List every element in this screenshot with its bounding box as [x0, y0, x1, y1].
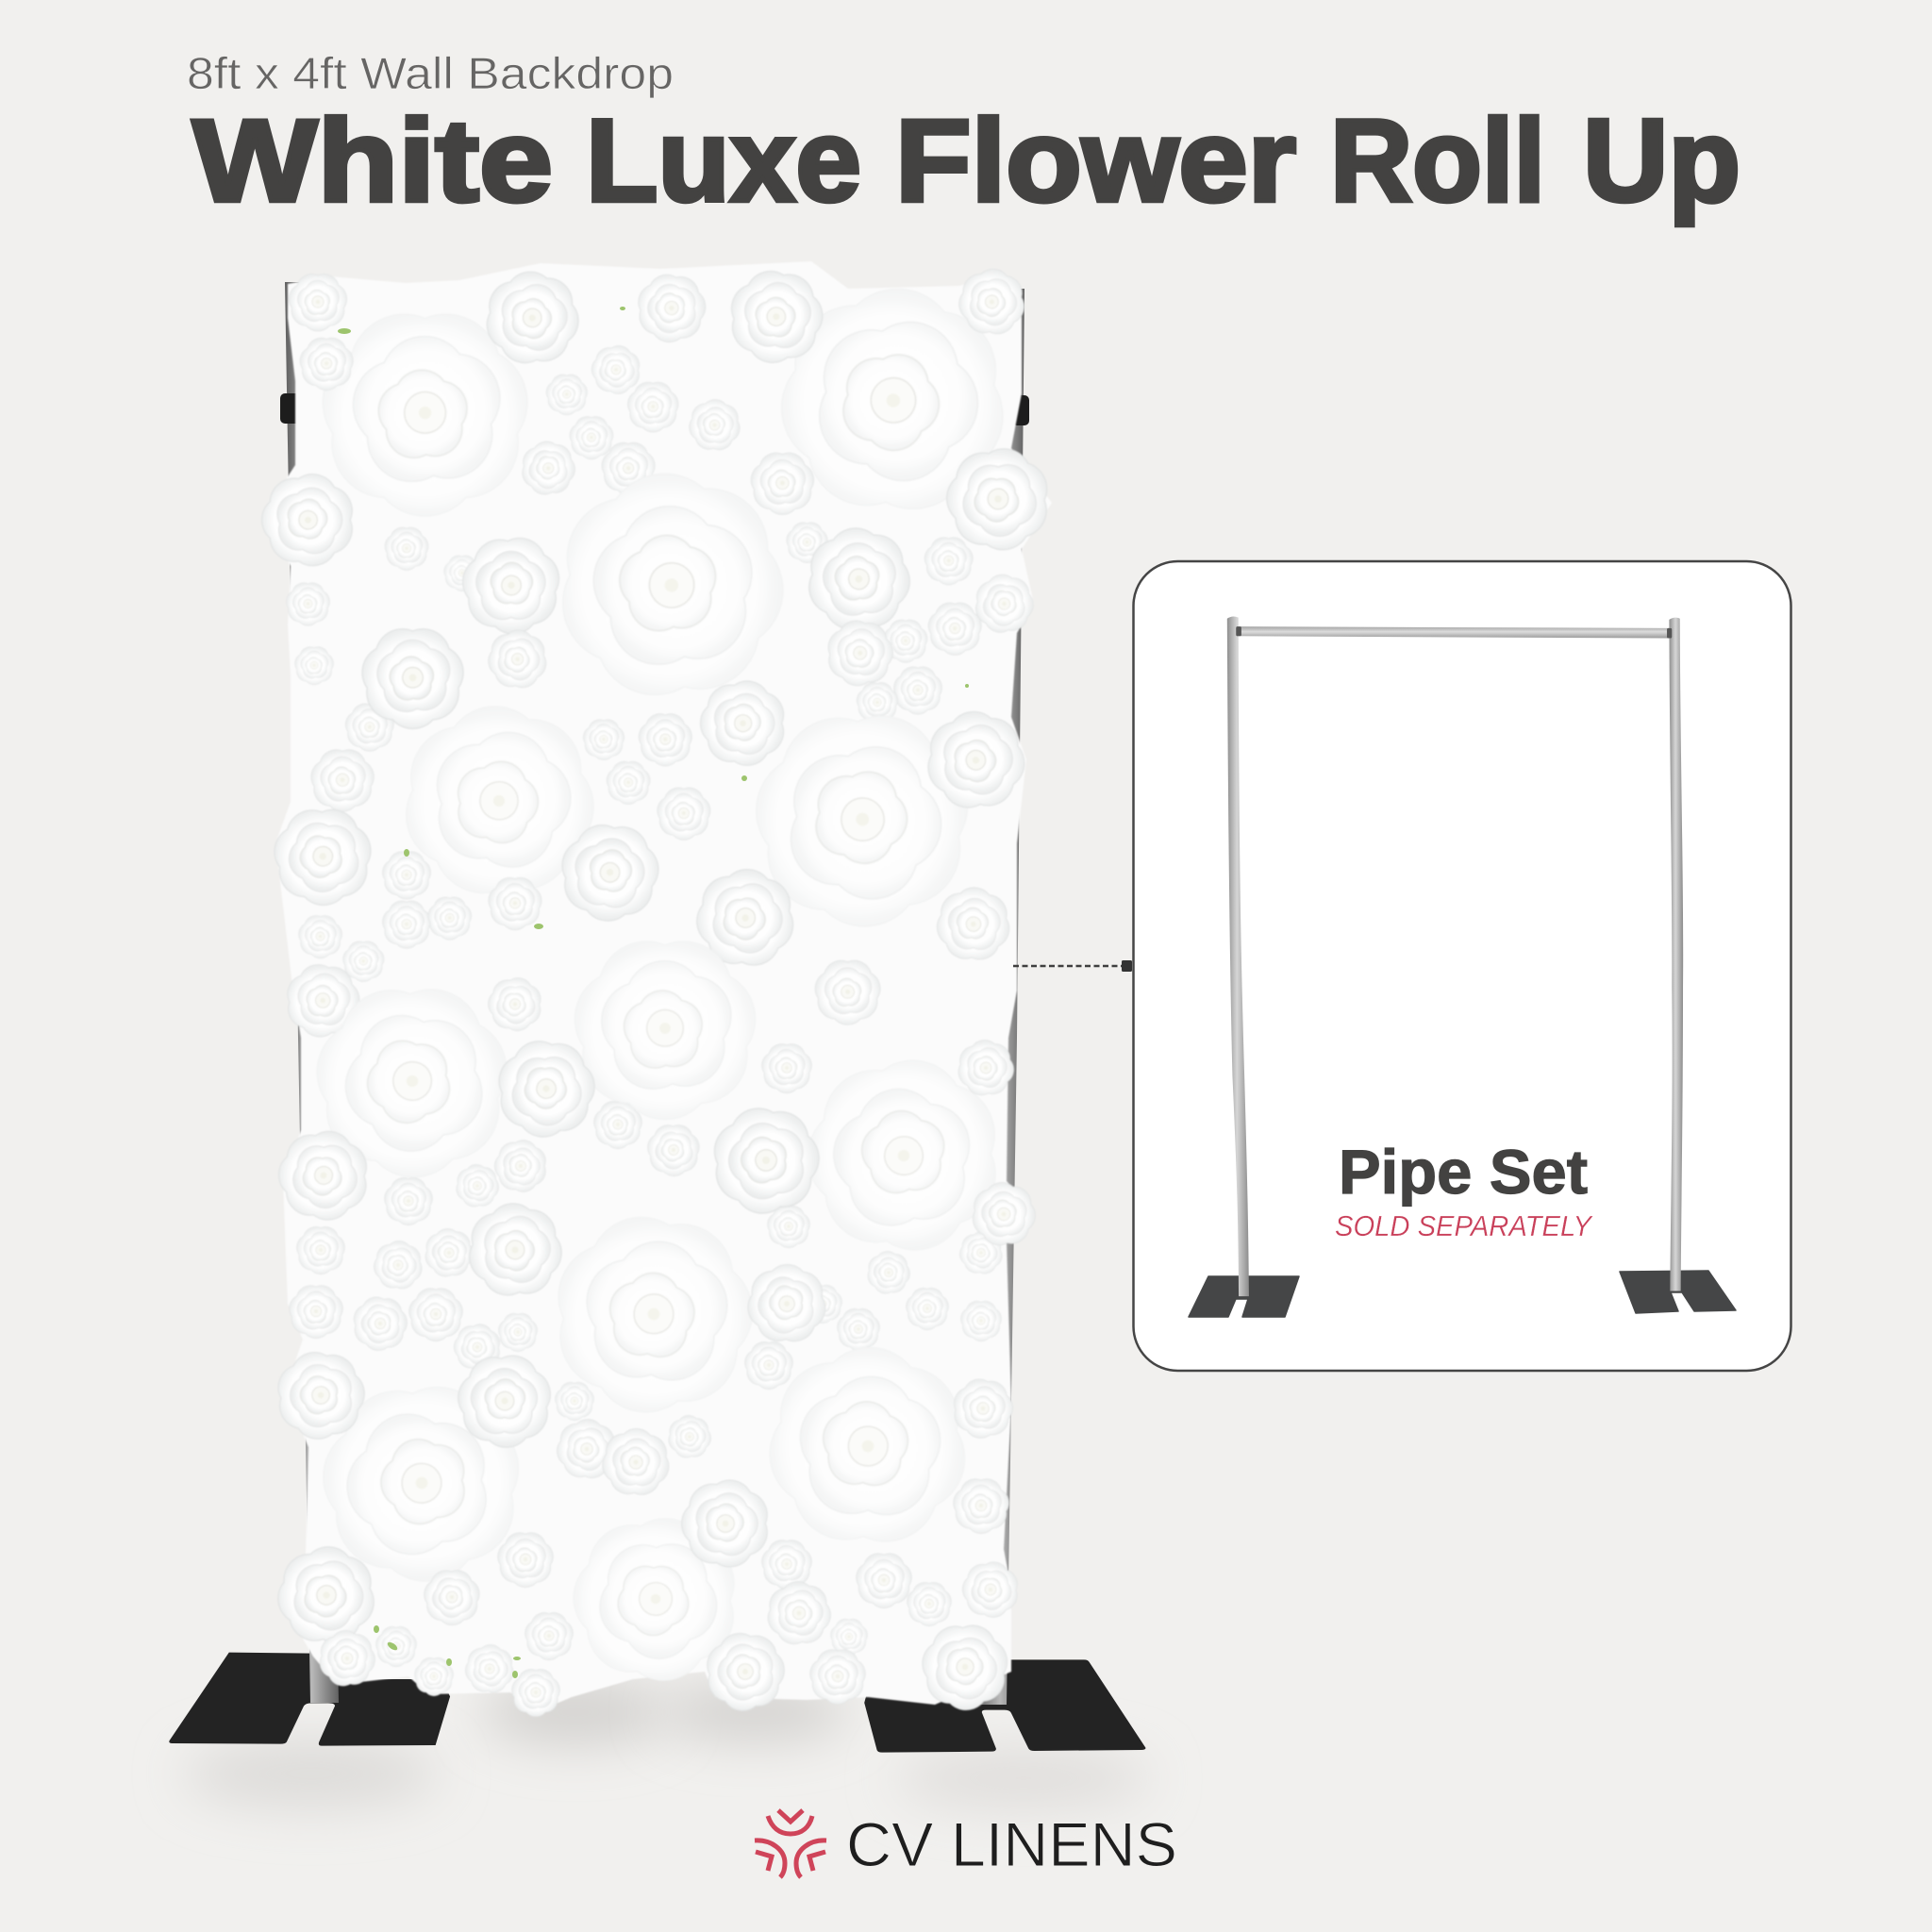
stand poles	[285, 282, 1024, 1705]
connector line	[1013, 960, 1132, 972]
logo wordmark: CV LINENS	[846, 1809, 1177, 1879]
lower roses	[260, 941, 1042, 1724]
straps	[280, 393, 1029, 425]
subtitle: 8ft x 4ft Wall Backdrop	[187, 48, 674, 98]
pipe set frame	[1189, 616, 1736, 1317]
sold separately note: SOLD SEPARATELY	[1335, 1209, 1593, 1242]
title: Roll	[1330, 96, 1545, 226]
title	[192, 96, 1740, 226]
green leaves	[338, 307, 969, 1678]
flower wall	[255, 253, 1068, 1724]
pipe set label: Pipe Set	[1339, 1137, 1588, 1207]
icon: CV Linens mark	[755, 1810, 826, 1877]
title: Luxe	[586, 96, 861, 226]
title: Flower	[895, 96, 1296, 226]
right stand base	[864, 1659, 1145, 1753]
title: White	[192, 96, 553, 226]
logo: CV Linens	[755, 1809, 1177, 1879]
title: Up	[1583, 96, 1740, 226]
left stand base	[169, 1653, 450, 1746]
floor shadows	[184, 1680, 1151, 1808]
upper roses	[255, 253, 1068, 1042]
product: flower wall backdrop on stand	[169, 253, 1145, 1753]
panel: pipe set	[1134, 561, 1790, 1371]
